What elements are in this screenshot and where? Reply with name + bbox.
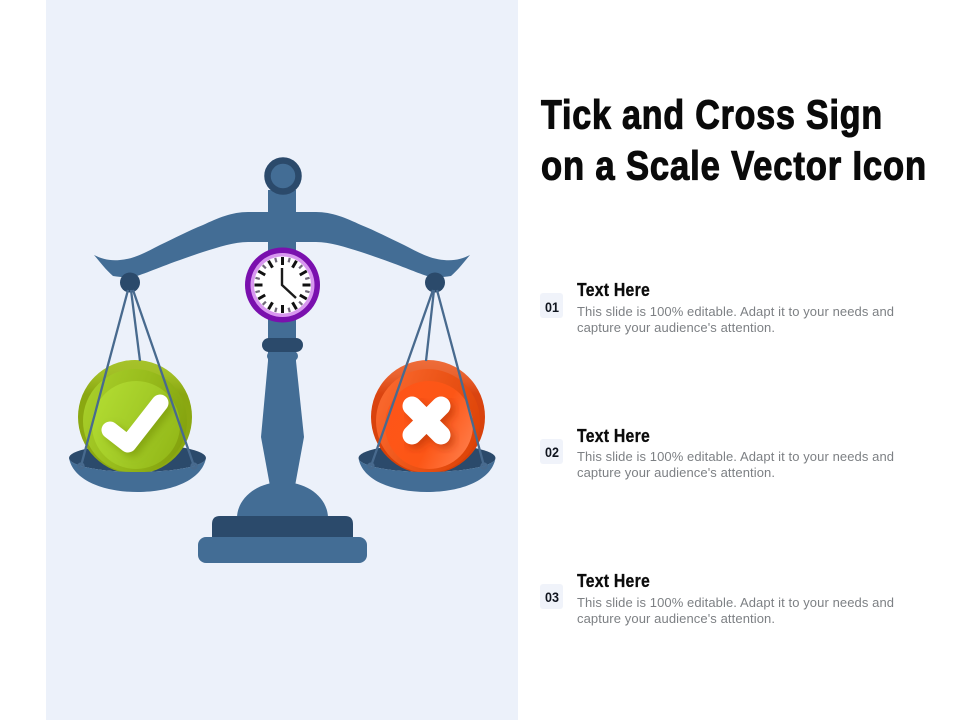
right pivot: [425, 272, 445, 292]
panel: left background: [46, 0, 518, 720]
scale column: [261, 190, 304, 486]
scale base: [198, 482, 367, 563]
icon: balance scale: [69, 160, 496, 563]
left pan back: [69, 444, 206, 472]
right pan strings: [368, 290, 486, 468]
body text 02: [577, 449, 894, 480]
list item 01: [540, 280, 894, 335]
top knob: [268, 160, 298, 192]
right pan back: [358, 444, 496, 472]
title: Tick and Cross Sign: [541, 92, 883, 138]
heading 01: Text Here: [577, 280, 650, 300]
number badge 02: [540, 439, 563, 464]
body text 02: capture your audience's attention.: [577, 465, 775, 480]
left pan strings: [78, 290, 196, 468]
scale beam: [94, 212, 470, 277]
icon: red cross ball: [371, 360, 485, 474]
icon: clock: [245, 248, 320, 322]
clock hour ticks: [254, 257, 310, 313]
list item 02: [540, 426, 894, 480]
number badge 02: 02: [545, 445, 559, 460]
number badge 01: [540, 293, 563, 318]
body text 01: capture your audience's attention.: [577, 320, 775, 335]
number badge 03: [540, 584, 563, 609]
heading 02: Text Here: [577, 426, 650, 446]
left pan bowl: [69, 458, 206, 492]
body text 02: This slide is 100% editable. Adapt it to your needs and: [577, 449, 894, 464]
number badge 01: 01: [545, 300, 559, 315]
right pan bowl: [358, 458, 496, 492]
body text 03: capture your audience's attention.: [577, 611, 775, 626]
clock minor ticks: [255, 258, 310, 312]
number badge 03: 03: [545, 590, 559, 605]
list item 03: [540, 571, 894, 626]
heading 03: Text Here: [577, 571, 650, 591]
icon: cross mark: [412, 406, 441, 435]
body text 03: [577, 595, 894, 626]
left pivot: [120, 272, 140, 292]
clock hands: [282, 268, 296, 298]
title: [541, 92, 927, 188]
icon: tick mark: [110, 403, 160, 444]
body text 01: [577, 304, 894, 335]
column collars: [262, 338, 303, 361]
body text 03: This slide is 100% editable. Adapt it to your needs and: [577, 595, 894, 610]
icon: green tick ball: [78, 360, 192, 474]
body text 01: This slide is 100% editable. Adapt it to your needs and: [577, 304, 894, 319]
